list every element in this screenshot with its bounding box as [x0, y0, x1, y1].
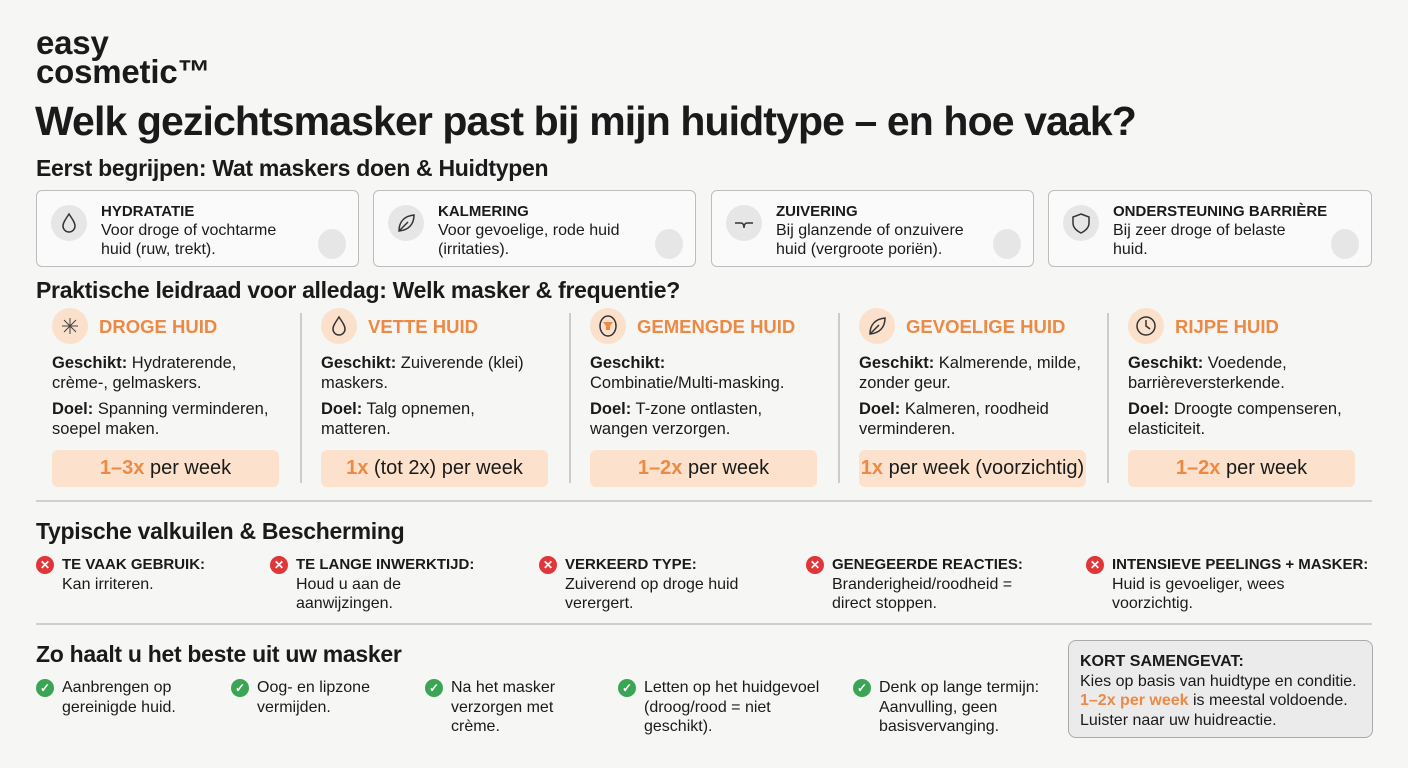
card: kalmering: [373, 190, 696, 267]
tip 5: basisvervanging.: [879, 718, 999, 735]
logo: [36, 24, 210, 90]
tip 3: [425, 679, 555, 735]
pitfall 1: [36, 556, 205, 592]
pitfall 4: GENEGEERDE REACTIES:: [832, 556, 1023, 573]
text: Geschikt: Kalmerende, milde, zonder geur.: [859, 354, 1081, 392]
column: gemengde huid: [590, 308, 817, 487]
pitfall 1: Kan irriteren.: [62, 576, 154, 592]
text: VETTE HUID: [368, 316, 478, 337]
text: Doel: Droogte compenseren, elasticiteit.: [1128, 400, 1342, 438]
summary box: KORT SAMENGEVAT:: [1080, 653, 1244, 670]
card: hydratatie: [36, 190, 359, 267]
summary box: Luister naar uw huidreactie.: [1080, 712, 1277, 728]
tip 4: (droog/rood = niet: [644, 698, 771, 716]
column: gevoelige huid: [859, 308, 1086, 487]
text: Geschikt: Voedende, barrièreversterkende.: [1128, 354, 1287, 392]
text: GEVOELIGE HUID: [906, 316, 1065, 337]
text: 1–3x per week: [100, 457, 231, 479]
summary box: [1068, 640, 1373, 738]
tip 4: ✓: [622, 681, 632, 695]
pitfall 1: TE VAAK GEBRUIK:: [62, 556, 205, 573]
text: Geschikt: Zuiverende (klei) maskers.: [321, 354, 524, 392]
text: Combinatie/Multi-masking.: [590, 374, 784, 392]
pitfall 3: ✕: [543, 558, 553, 572]
pitfall 5: Huid is gevoeliger, wees: [1112, 576, 1285, 592]
tip 3: ✓: [429, 681, 439, 695]
text: Doel: Kalmeren, roodheid verminderen.: [859, 400, 1049, 438]
heading: beste uit masker: Zo haalt u het beste uit uw masker: [36, 641, 402, 667]
tip 2: [231, 679, 370, 716]
tip 4: [618, 679, 819, 735]
pitfall 2: [270, 556, 474, 612]
summary box: Kies op basis van huidtype en conditie.: [1080, 672, 1357, 690]
text: Doel: T-zone ontlasten, wangen verzorgen.: [590, 400, 762, 438]
pitfall 4: Branderigheid/roodheid =: [832, 576, 1012, 592]
card: hydratatie: huid (ruw, trekt).: [101, 241, 216, 258]
tip 5: [853, 679, 1039, 735]
text: GEMENGDE HUID: [637, 316, 795, 337]
text: Geschikt: Hydraterende, crème-, gelmaskers.: [52, 354, 236, 392]
card: barriere: huid.: [1113, 241, 1148, 258]
tip 5: ✓: [857, 681, 867, 695]
tip 1: Aanbrengen op: [62, 679, 171, 696]
tip 2: ✓: [235, 681, 245, 695]
card: barriere: ONDERSTEUNING BARRIÈRE: [1113, 203, 1327, 220]
summary box: 1–2x per week is meestal voldoende.: [1080, 692, 1348, 709]
card: barriere: Bij zeer droge of belaste: [1113, 222, 1286, 239]
icon: drop: [51, 205, 87, 241]
text: Doel: Talg opnemen, matteren.: [321, 400, 475, 438]
pitfall 2: TE LANGE INWERKTIJD:: [296, 556, 474, 573]
card: kalmering: Voor gevoelige, rode huid: [438, 222, 619, 239]
card: zuivering: [711, 190, 1034, 267]
tip 4: geschikt).: [644, 718, 712, 735]
card: barriere: [1048, 190, 1372, 267]
pitfall 3: VERKEERD TYPE:: [565, 556, 697, 573]
pitfall 3: Zuiverend op droge huid: [565, 576, 738, 592]
text: RIJPE HUID: [1175, 316, 1279, 337]
pitfall 4: direct stoppen.: [832, 595, 937, 612]
text: 1–2x per week: [638, 457, 769, 479]
pitfall 4: [806, 556, 1023, 612]
column: vette huid: [321, 308, 548, 487]
icon: leaf: [388, 205, 424, 241]
tip 2: Oog- en lipzone: [257, 679, 370, 696]
icon: pore: [726, 205, 762, 241]
heading: valkuilen: Typische valkuilen & Bescherming: [36, 518, 404, 544]
heading: eerst begrijpen: Eerst begrijpen: Wat maskers doen & Huidtypen: [36, 155, 548, 181]
text: 1–2x per week: [1176, 457, 1307, 479]
pitfall 3: verergert.: [565, 595, 633, 612]
icon: shield: [1063, 205, 1099, 241]
title: Welk gezichtsmasker past bij mijn huidtype – en hoe vaak?: [35, 98, 1136, 144]
tip 2: vermijden.: [257, 698, 331, 716]
pitfall 2: aanwijzingen.: [296, 595, 393, 612]
text: 1x per week (voorzichtig): [861, 457, 1084, 479]
pitfall 3: [539, 556, 738, 612]
pitfall 5: ✕: [1090, 558, 1100, 572]
tip 1: ✓: [40, 681, 50, 695]
pitfall 2: Houd u aan de: [296, 576, 401, 592]
card: hydratatie: HYDRATATIE: [101, 203, 194, 220]
pitfall 5: INTENSIEVE PEELINGS + MASKER:: [1112, 556, 1368, 573]
card: kalmering: KALMERING: [438, 203, 529, 220]
tip 1: gereinigde huid.: [62, 698, 176, 716]
tip 3: verzorgen met: [451, 698, 553, 716]
tip 3: crème.: [451, 718, 500, 735]
text: Doel: Spanning verminderen, soepel maken.: [52, 400, 268, 438]
card: zuivering: ZUIVERING: [776, 203, 858, 220]
tip 1: [36, 679, 176, 716]
card: zuivering: huid (vergroote poriën).: [776, 241, 942, 258]
pitfall 1: ✕: [40, 558, 50, 572]
pitfall 4: ✕: [810, 558, 820, 572]
text: 1x (tot 2x) per week: [346, 457, 523, 479]
pitfall 5: [1086, 556, 1368, 612]
tip 3: Na het masker: [451, 679, 555, 696]
pitfall 5: voorzichtig.: [1112, 595, 1193, 612]
column: droge huid: [52, 308, 279, 487]
pitfall 2: ✕: [274, 558, 284, 572]
heading: praktische leidraad: Praktische leidraad voor alledag: Welk masker & frequentie?: [36, 277, 680, 303]
text: Geschikt:: [590, 354, 665, 372]
tip 4: Letten op het huidgevoel: [644, 679, 819, 696]
logo: cosmetic™: [36, 53, 210, 90]
text: DROGE HUID: [99, 316, 217, 337]
tip 5: Aanvulling, geen: [879, 698, 997, 716]
card: hydratatie: Voor droge of vochtarme: [101, 222, 276, 239]
column: rijpe huid: [1128, 308, 1355, 487]
tip 5: Denk op lange termijn:: [879, 679, 1039, 696]
card: kalmering: (irritaties).: [438, 241, 509, 258]
card: zuivering: Bij glanzende of onzuivere: [776, 222, 964, 239]
logo: easy: [36, 24, 109, 61]
